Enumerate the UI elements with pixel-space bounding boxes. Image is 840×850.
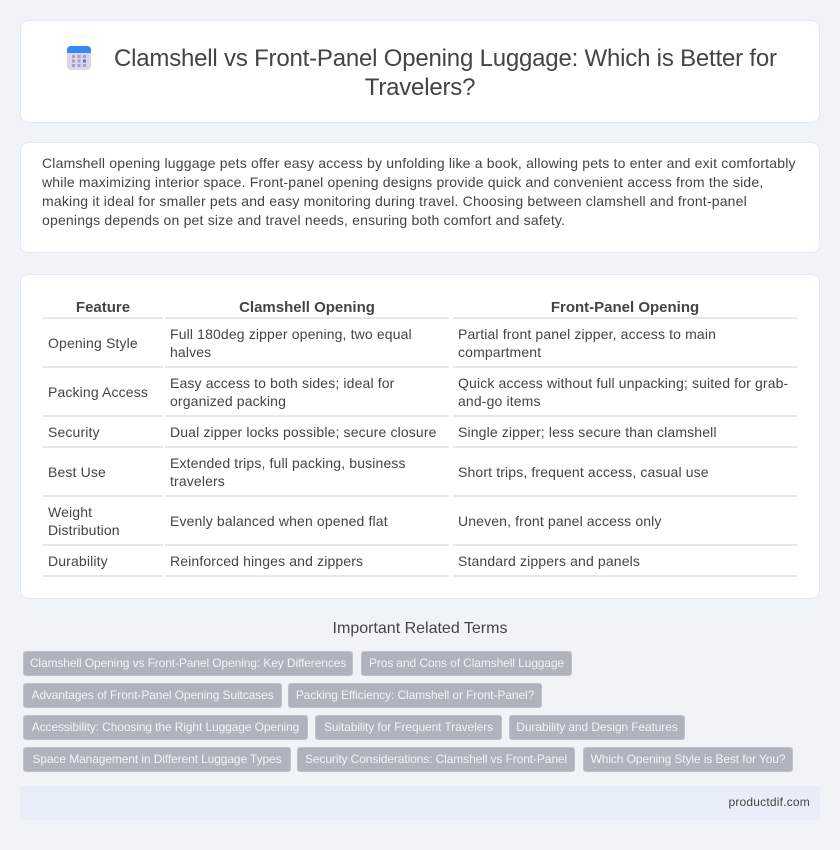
tag <box>583 747 793 772</box>
intro paragraph <box>42 155 796 228</box>
row: weight distribution: Weight <box>48 504 92 520</box>
row: packing access <box>48 375 788 409</box>
row: weight distribution: Evenly balanced when opened flat <box>170 513 388 529</box>
intro paragraph: while maximizing interior space. Front-panel opening designs provide quick and convenient access from the side, <box>42 174 763 190</box>
tag <box>23 683 282 708</box>
row: best use <box>48 455 709 489</box>
tag <box>23 715 308 740</box>
row: packing access: Easy access to both sides; ideal for <box>170 375 394 391</box>
title: Travelers? <box>365 74 475 101</box>
panel: introduction text <box>20 142 820 253</box>
row: packing access: and-go items <box>458 393 541 409</box>
row: packing access: Packing Access <box>48 384 148 400</box>
row: durability: Standard zippers and panels <box>458 553 640 569</box>
tag: Accessibility: Choosing the Right Luggage Opening <box>32 720 299 734</box>
tag <box>297 747 575 772</box>
tag: Suitability for Frequent Travelers <box>324 720 493 734</box>
row: packing access: organized packing <box>170 393 286 409</box>
tag <box>509 715 685 740</box>
tag <box>23 747 291 772</box>
tag: Durability and Design Features <box>516 720 678 734</box>
tag: Clamshell Opening vs Front-Panel Opening: Key Differences <box>30 656 346 670</box>
tag <box>361 651 572 676</box>
row: security: Dual zipper locks possible; secure closure <box>170 424 437 440</box>
tag: Advantages of Front-Panel Opening Suitcases <box>31 688 274 702</box>
tag: Space Management in Different Luggage Types <box>32 752 282 766</box>
intro paragraph: openings depends on pet size and travel needs, ensuring both comfort and safety. <box>42 212 565 228</box>
table header row: Clamshell Opening <box>239 299 375 316</box>
panel: comparison table <box>20 274 820 599</box>
intro paragraph: Clamshell opening luggage pets offer easy access by unfolding like a book, allowing pets to enter and exit comfortably <box>42 155 796 171</box>
icon: calendar <box>67 46 91 70</box>
row: durability <box>48 553 640 569</box>
panel: title card <box>20 20 820 123</box>
row: opening style: halves <box>170 344 211 360</box>
row: opening style: Opening Style <box>48 335 138 351</box>
footer source text: productdif.com <box>728 795 810 809</box>
row: packing access: Quick access without full unpacking; suited for grab- <box>458 375 788 391</box>
related terms tags <box>23 651 793 772</box>
table header row: Feature <box>76 299 130 316</box>
intro paragraph: making it ideal for smaller pets and easy monitoring during travel. Choosing between clamshell and front-panel <box>42 193 747 209</box>
title <box>114 45 777 101</box>
row: best use: Best Use <box>48 464 106 480</box>
row: security <box>48 424 717 440</box>
tag: Security Considerations: Clamshell vs Front-Panel <box>305 752 567 766</box>
tag <box>288 683 542 708</box>
row: best use: travelers <box>170 473 225 489</box>
table header row <box>76 299 699 316</box>
footer <box>20 786 820 820</box>
row: opening style: Full 180deg zipper opening, two equal <box>170 326 412 342</box>
row: security: Security <box>48 424 100 440</box>
row: opening style <box>48 326 716 360</box>
tag <box>315 715 502 740</box>
row: durability: Reinforced hinges and zippers <box>170 553 363 569</box>
title: Clamshell vs Front-Panel Opening Luggage: Which is Better for <box>114 45 777 72</box>
tag <box>23 651 353 676</box>
tag: Which Opening Style is Best for You? <box>591 752 785 766</box>
tag: Packing Efficiency: Clamshell or Front-Panel? <box>296 688 534 702</box>
row: weight distribution: Uneven, front panel access only <box>458 513 662 529</box>
row: opening style: Partial front panel zipper, access to main <box>458 326 716 342</box>
table header row: Front-Panel Opening <box>551 299 699 316</box>
row: durability: Durability <box>48 553 108 569</box>
tag: Pros and Cons of Clamshell Luggage <box>369 656 564 670</box>
row: weight distribution: Distribution <box>48 522 120 538</box>
row: best use: Extended trips, full packing, business <box>170 455 406 471</box>
row: weight distribution <box>48 504 662 538</box>
row: opening style: compartment <box>458 344 541 360</box>
heading: important related terms: Important Related Terms <box>333 620 507 637</box>
row: best use: Short trips, frequent access, casual use <box>458 464 709 480</box>
row: security: Single zipper; less secure than clamshell <box>458 424 717 440</box>
